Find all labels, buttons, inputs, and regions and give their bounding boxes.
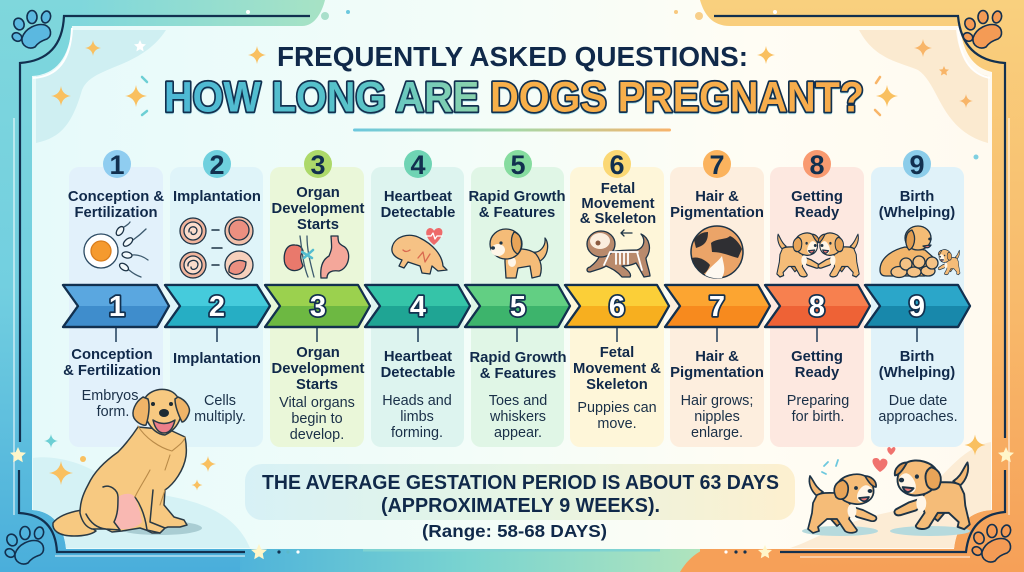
chevron 4: 4: [410, 291, 426, 323]
title underline: [353, 128, 671, 132]
panel: step 7: Pigmentation: [670, 365, 764, 381]
panel: step 4: limbs: [400, 409, 434, 425]
panel: step 5: & Features: [479, 205, 555, 221]
panel: step 3: Organ: [296, 185, 340, 201]
icon: paw bottom left: [4, 526, 45, 564]
panel: step 4: forming.: [391, 425, 443, 441]
chevron 5: [465, 285, 570, 327]
panel: step 8: Preparing: [787, 393, 849, 409]
panel: step 2: [170, 150, 263, 447]
chevron 9: [865, 285, 970, 327]
panel: step 4: Detectable: [381, 205, 455, 221]
connector ticks: [116, 328, 917, 342]
panel: step 1: Embryos: [82, 388, 138, 404]
panel: step 3: develop.: [290, 427, 344, 443]
chevron 3: [265, 285, 370, 327]
panel: step 3: Development: [272, 201, 365, 217]
chevron 8: 8: [809, 291, 825, 323]
panel: step 7: Hair grows;: [681, 393, 753, 409]
icon: implantation cells: [180, 217, 253, 279]
panel: step 3: Starts: [296, 377, 338, 393]
illustration: playing puppies: [802, 447, 970, 536]
panel: step 4: Heartbeat: [384, 189, 452, 205]
panel: step 3: Starts: [297, 217, 339, 233]
panel: step 5: Rapid Growth: [470, 350, 566, 366]
title line two: HOW LONG ARE DOGS PREGNANT?: [164, 74, 864, 122]
panel: step 9: (Whelping): [879, 365, 955, 381]
panel: step 7: nipples: [694, 409, 740, 425]
panel: step 2: Implantation: [173, 351, 261, 367]
panel: step 1: Conception &: [68, 189, 164, 205]
panel: step 6: Movement &: [573, 361, 661, 377]
panel: step 6: move.: [597, 416, 637, 432]
chevron 6: [565, 285, 669, 327]
panel: step 8: Getting: [791, 189, 843, 205]
panel: step 7: 7: [709, 150, 725, 180]
icon: fetus with heartbeat: [392, 228, 447, 274]
panel: step 3: begin to: [291, 411, 343, 427]
panel: step 7: Hair &: [695, 349, 739, 365]
icon: growing puppy: [490, 229, 548, 278]
callout: average gestation: THE AVERAGE GESTATION PERIOD IS ABOUT 63 DAYS: [262, 472, 779, 494]
panel: step 1: [63, 150, 164, 447]
chevron 3: 3: [310, 291, 326, 323]
panel: step 4: Heads and: [382, 393, 452, 409]
panel: step 8: Ready: [795, 205, 840, 221]
panel: step 3: 3: [310, 150, 326, 180]
chevron 8: [765, 285, 870, 327]
panel: step 6: Puppies can: [577, 400, 657, 416]
panel: step 6: [570, 150, 664, 447]
chevron 7: 7: [709, 291, 725, 323]
panel: step 3: Development: [272, 361, 365, 377]
panel: step 6: & Skeleton: [580, 211, 656, 227]
panel: step 7: enlarge.: [691, 425, 743, 441]
icon: puppy skeleton: [587, 230, 650, 277]
panel: step 1: form.: [97, 404, 129, 420]
icon: fur pigmentation circle: [691, 226, 743, 278]
panel: step 1: 1: [109, 150, 125, 180]
panel: step 4: 4: [410, 150, 426, 180]
chevron 9: 9: [909, 291, 925, 323]
panel: step 5: 5: [510, 150, 526, 180]
panel: step 5: appear.: [494, 425, 542, 441]
panel: step 9: approaches.: [878, 409, 958, 425]
panel: step 2: multiply.: [194, 409, 246, 425]
panel: step 5: & Features: [480, 366, 556, 382]
panel: step 8: Ready: [795, 365, 840, 381]
panel: step 7: Pigmentation: [670, 205, 764, 221]
chevron 1: 1: [109, 291, 125, 323]
chevron 1: [63, 285, 169, 327]
chevron 5: 5: [510, 291, 526, 323]
chevron 6: 6: [609, 291, 625, 323]
panel: step 1: & Fertilization: [63, 363, 161, 379]
icon: paw bottom right: [971, 524, 1012, 562]
panel: step 8: 8: [809, 150, 825, 180]
panel: step 5: Toes and: [489, 393, 547, 409]
icon: mother dog with puppies: [880, 226, 960, 278]
icon: kidney and stomach: [284, 236, 349, 278]
callout: average gestation: (Range: 58-68 DAYS): [422, 521, 607, 541]
icon: two puppies: [777, 233, 859, 277]
panel: step 9: Birth: [900, 349, 934, 365]
panel: step 2: Cells: [204, 393, 236, 409]
timeline chevrons: [63, 285, 970, 327]
icon: egg and sperm: [84, 222, 148, 277]
title: [164, 41, 864, 132]
panel: step 6: Fetal: [600, 345, 634, 361]
panel: step 9: [871, 150, 964, 447]
panel: step 8: [770, 150, 864, 447]
callout: average gestation: [245, 464, 795, 541]
panel: step 7: [670, 150, 764, 447]
panel: step 2: 2: [209, 150, 225, 180]
illustration: golden retriever: [53, 389, 202, 536]
callout: average gestation: (APPROXIMATELY 9 WEEKS).: [381, 495, 660, 517]
panel: step 3: Organ: [296, 345, 340, 361]
panel: step 7: Hair &: [695, 189, 739, 205]
panel: step 4: Detectable: [381, 365, 455, 381]
chevron 2: 2: [209, 291, 225, 323]
panel: step 3: Vital organs: [279, 395, 355, 411]
panel: step 9: Due date: [889, 393, 947, 409]
panel: step 6: 6: [609, 150, 625, 180]
panel: step 9: 9: [909, 150, 925, 180]
panel: step 3: [270, 150, 365, 447]
chevron 7: [665, 285, 770, 327]
panel: step 5: [468, 150, 566, 447]
panel: step 9: Birth: [900, 189, 934, 205]
panel: step 8: Getting: [791, 349, 843, 365]
panel: step 8: for birth.: [792, 409, 844, 425]
panel: step 5: Rapid Growth: [468, 189, 566, 205]
panel: step 1: Fertilization: [74, 205, 158, 221]
panel: step 6: Movement: [581, 196, 655, 212]
chevron 4: [365, 285, 470, 327]
panel: step 6: Fetal: [601, 181, 635, 197]
icon: paw top left: [11, 10, 52, 48]
panel: step 1: Conception: [71, 347, 153, 363]
chevron 2: [165, 285, 270, 327]
panel: step 4: [371, 150, 464, 447]
panel: step 2: Implantation: [173, 189, 261, 205]
title line one: FREQUENTLY ASKED QUESTIONS:: [277, 41, 748, 72]
panel: step 4: Heartbeat: [384, 349, 452, 365]
panel: step 5: whiskers: [489, 409, 546, 425]
icon: paw top right: [962, 10, 1003, 48]
panel: step 9: (Whelping): [879, 205, 955, 221]
panel: step 6: Skeleton: [586, 377, 648, 393]
